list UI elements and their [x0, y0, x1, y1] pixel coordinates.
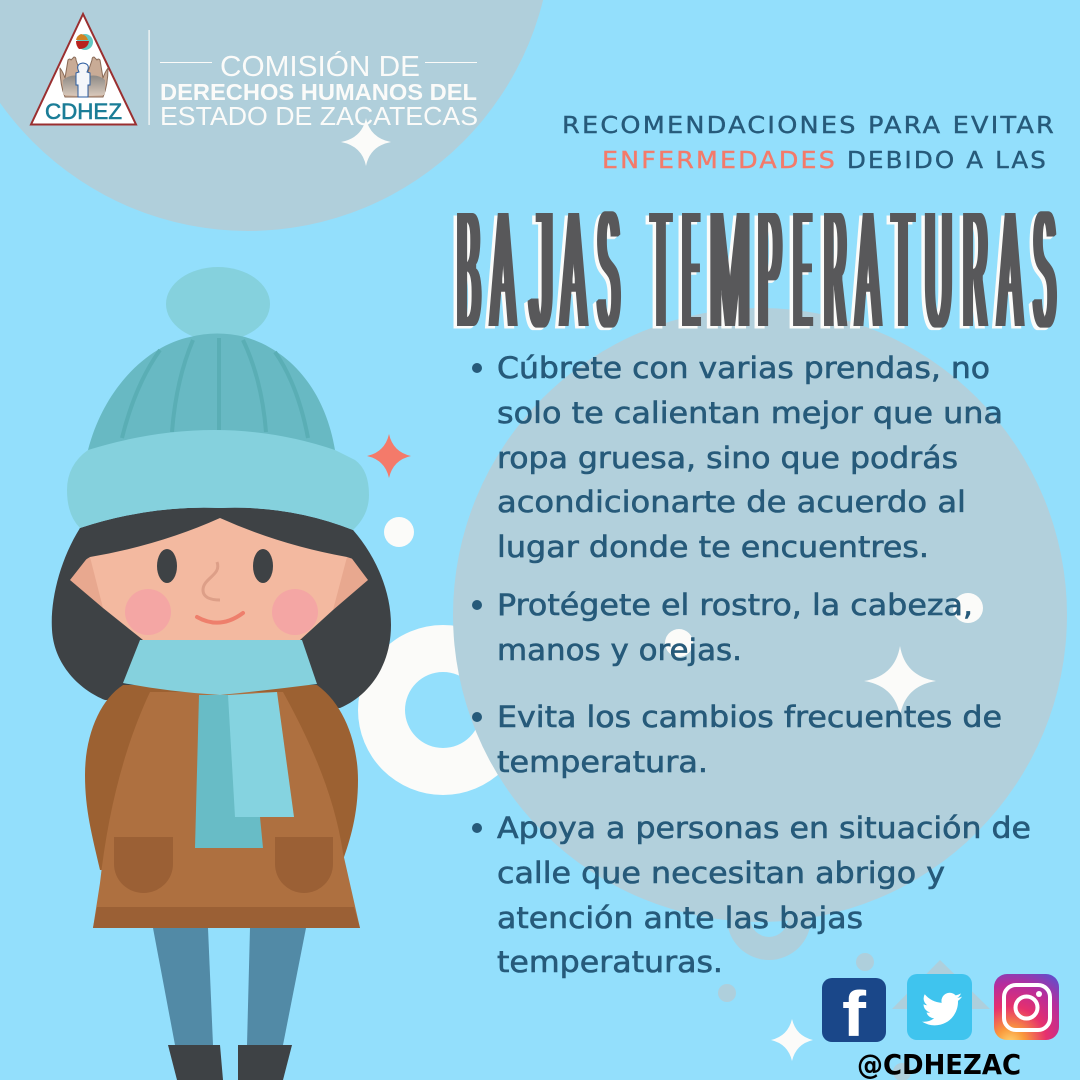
hair: [52, 528, 391, 708]
heading: recommendations intro: ENFERMEDADES: [602, 148, 837, 174]
icon: twitter: [907, 974, 972, 1040]
logo triangle: [31, 14, 136, 124]
bullet 4: temperaturas.: [497, 945, 723, 979]
logo sun: [76, 34, 93, 50]
organisation name: ESTADO DE ZACATECAS: [160, 101, 478, 131]
decoration: white ring: [358, 625, 528, 795]
legs: [153, 928, 306, 1045]
title: shadow and face: R: [822, 178, 842, 368]
title: shadow and face: U: [922, 178, 948, 368]
title: shadow and face: R: [960, 178, 983, 368]
title: shadow and face: T: [893, 175, 913, 365]
hat dome: [88, 334, 335, 450]
eyes: [157, 549, 273, 583]
ear right: [326, 552, 368, 610]
bullet 3: [472, 700, 1002, 779]
title: shadow and face: T: [648, 178, 667, 368]
icon: facebook: f: [842, 978, 867, 1050]
logo: CDHEZ triangle: [31, 14, 136, 124]
title: shadow and face: [454, 175, 1055, 368]
scarf tail back: [195, 695, 263, 848]
title: shadow and face: J: [530, 175, 553, 365]
heading: recommendations intro: [562, 113, 1056, 174]
title: shadow and face: P: [759, 175, 781, 365]
title: shadow and face: A: [558, 178, 582, 368]
scarf neck: [123, 640, 317, 695]
nose: [203, 562, 220, 600]
decoration: white star bottom: [771, 1019, 813, 1061]
pom-pom: [166, 267, 270, 341]
panel: large circle: [453, 308, 1067, 922]
title: shadow and face: P: [755, 178, 778, 368]
title: shadow and face: T: [889, 178, 910, 368]
face: [90, 518, 347, 640]
title: shadow and face: A: [492, 175, 515, 365]
pocket right: [275, 837, 333, 893]
bullet 1: Cúbrete con varias prendas, no: [497, 351, 990, 385]
logo divider: [148, 30, 150, 125]
icon: facebook: [822, 978, 886, 1050]
title: shadow and face: E: [795, 175, 811, 365]
organisation name: DERECHOS HUMANOS DEL: [160, 79, 477, 105]
bullet 3: temperatura.: [497, 745, 708, 779]
coat sleeves: [85, 685, 358, 870]
title: shadow and face: A: [856, 175, 880, 365]
bullet 2: Protégete el rostro, la cabeza,: [497, 588, 973, 622]
hat ribs: [122, 338, 308, 438]
cheeks: [125, 589, 318, 635]
bullet 4: Apoya a personas en situación de: [497, 811, 1031, 845]
organisation name: [160, 50, 478, 131]
bullet 4: [472, 811, 1031, 979]
boots: [168, 1045, 292, 1080]
bullet 1: ropa gruesa, sino que podrás: [497, 441, 958, 475]
title: shadow and face: A: [853, 178, 876, 368]
title: shadow and face: B: [458, 175, 480, 365]
title: shadow and face: M: [710, 175, 750, 365]
mouth: [197, 613, 243, 623]
organisation name: COMISIÓN DE: [220, 50, 420, 83]
pocket left: [114, 837, 173, 893]
title: shadow and face: S: [595, 178, 616, 368]
bullet 1: solo te calientan mejor que una: [497, 396, 1003, 430]
panel: top-left circle: [0, 0, 552, 231]
heading: recommendations intro: DEBIDO A LAS: [847, 148, 1048, 174]
title: shadow and face: E: [791, 178, 807, 368]
logo name: CDHEZ: [45, 99, 122, 124]
bullet 2: [472, 588, 973, 667]
heading: recommendations intro: RECOMENDACIONES PARA EVITAR: [562, 113, 1056, 139]
illustration: girl in winter clothes: [52, 267, 391, 1080]
coat hem: [93, 907, 360, 928]
decoration: grey dots and triangle: [718, 953, 990, 1080]
title: shadow and face: U: [926, 175, 951, 365]
scarf tail front: [228, 692, 294, 817]
decoration: white dots: [384, 517, 983, 657]
title: shadow and face: R: [825, 175, 846, 365]
title: shadow and face: E: [680, 178, 695, 368]
title: shadow and face: E: [684, 175, 698, 365]
title: shadow and face: M: [706, 178, 746, 368]
title: shadow and face: A: [488, 178, 511, 368]
decoration: grey ring: [727, 876, 811, 960]
bullet 1: acondicionarte de acuerdo al: [497, 485, 966, 519]
bullet 4: atención ante las bajas: [497, 901, 863, 935]
title: shadow and face: B: [454, 178, 476, 368]
logo person: [76, 63, 90, 97]
decoration: white star top: [341, 118, 391, 166]
bullet 3: Evita los cambios frecuentes de: [497, 700, 1002, 734]
hat brim: [67, 430, 369, 530]
title: shadow and face: J: [527, 178, 549, 368]
recommendation list: [472, 351, 1031, 979]
bullet 4: calle que necesitan abrigo y: [497, 856, 945, 890]
title: shadow and face: T: [652, 175, 670, 365]
icon: instagram: [994, 974, 1059, 1040]
logo hands: [60, 57, 108, 97]
ear left: [70, 552, 112, 608]
bullet 2: manos y orejas.: [497, 633, 742, 667]
bullet 1: lugar donde te encuentres.: [497, 530, 929, 564]
title: shadow and face: S: [598, 175, 619, 365]
title: shadow and face: A: [562, 175, 586, 365]
decoration: coral star: [367, 434, 411, 478]
bullet 1: [472, 351, 1003, 564]
decoration: white star middle: [864, 646, 936, 716]
coat body: [93, 692, 360, 928]
fringe: [72, 508, 362, 568]
